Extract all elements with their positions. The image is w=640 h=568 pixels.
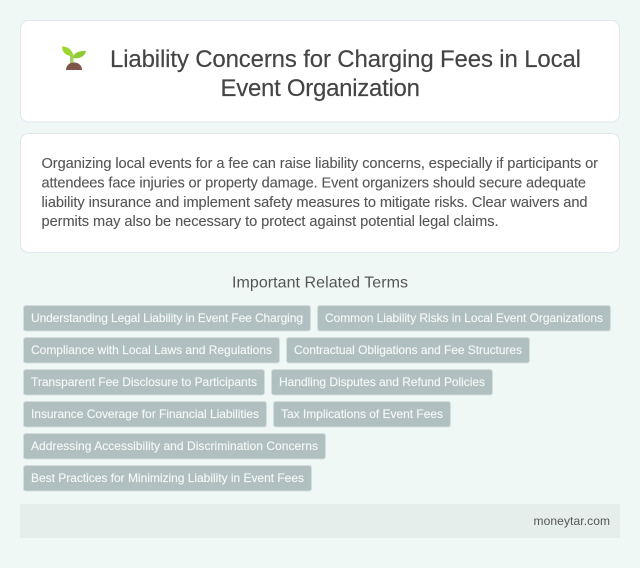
tag bbox=[24, 402, 266, 427]
panel: header card bbox=[20, 20, 620, 122]
tag bbox=[272, 370, 492, 395]
tag bbox=[24, 338, 280, 363]
tag bbox=[24, 306, 310, 331]
tag: Common Liability Risks in Local Event Organizations bbox=[325, 311, 603, 325]
tag bbox=[24, 466, 312, 491]
tag: Best Practices for Minimizing Liability in Event Fees bbox=[31, 471, 304, 485]
description text: Organizing local events for a fee can raise liability concerns, especially if participants or bbox=[42, 156, 598, 172]
tag: Addressing Accessibility and Discrimination Concerns bbox=[31, 439, 318, 453]
footer source text: moneytar.com bbox=[534, 514, 610, 528]
icon: seedling bbox=[62, 46, 86, 70]
title: Event Organization bbox=[220, 75, 420, 102]
tag: Tax Implications of Event Fees bbox=[281, 407, 443, 421]
tag bbox=[24, 370, 264, 395]
tag: Insurance Coverage for Financial Liabilities bbox=[31, 407, 259, 421]
title bbox=[110, 46, 581, 102]
description text: attendees face injuries or property damage. Event organizers should secure adequate bbox=[42, 176, 586, 192]
tag: Handling Disputes and Refund Policies bbox=[279, 375, 485, 389]
tag: Understanding Legal Liability in Event Fee Charging bbox=[31, 311, 303, 325]
panel: description card bbox=[20, 134, 620, 252]
tag bbox=[286, 338, 530, 363]
tag bbox=[318, 306, 610, 331]
tag: Compliance with Local Laws and Regulations bbox=[31, 343, 272, 357]
description text: permits may also be necessary to protect against potential legal claims. bbox=[42, 214, 498, 230]
description text bbox=[42, 156, 598, 230]
tag bbox=[274, 402, 450, 427]
tag list bbox=[24, 306, 610, 491]
description text: liability insurance and implement safety measures to mitigate risks. Clear waivers and bbox=[42, 195, 588, 211]
tag: Transparent Fee Disclosure to Participants bbox=[31, 375, 257, 389]
footer bbox=[20, 504, 620, 538]
heading: important related terms: Important Related Terms bbox=[232, 274, 408, 292]
title: Liability Concerns for Charging Fees in Local bbox=[110, 46, 581, 73]
tag: Contractual Obligations and Fee Structures bbox=[294, 343, 522, 357]
tag bbox=[24, 434, 326, 459]
